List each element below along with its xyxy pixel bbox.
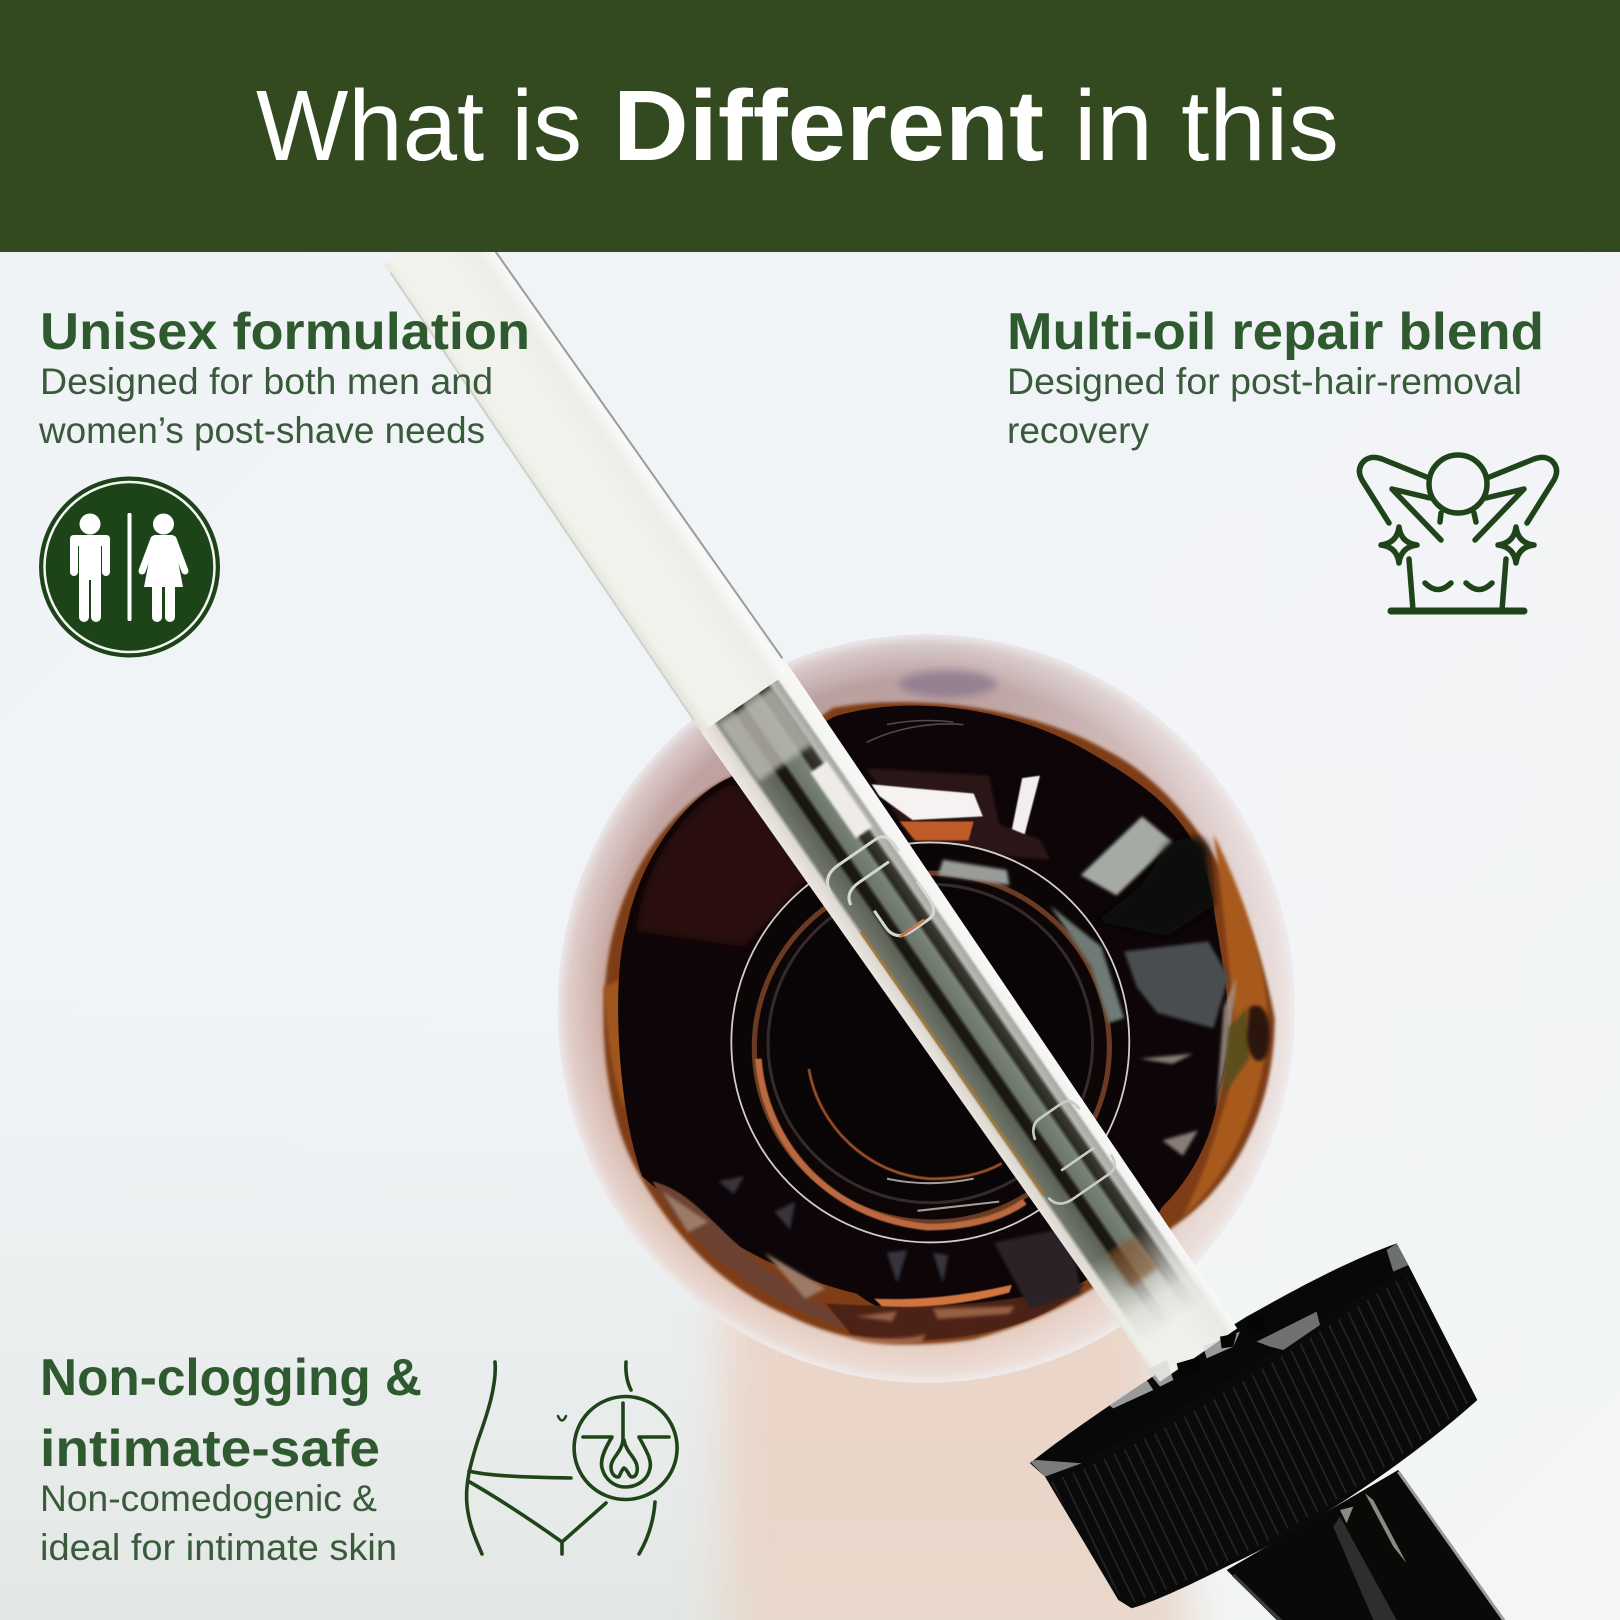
- brown fade inside tube: [1107, 1235, 1158, 1287]
- text block: non-clogging and intimate-safe: [40, 1349, 422, 1568]
- upper tube glass: [379, 205, 1250, 1395]
- lower reflections in base: [719, 1176, 948, 1283]
- neck grey speckle: [1050, 906, 1124, 1023]
- neck glints: [1340, 1493, 1407, 1563]
- left amber glow: [604, 980, 625, 1110]
- glass pipette tube: [379, 205, 1250, 1395]
- dark panel around top glare: [867, 768, 1050, 860]
- bottle rim light: [558, 635, 1295, 1383]
- grey window reflection: [1081, 816, 1173, 896]
- neck outer ring: [731, 842, 1129, 1242]
- black ribbed cap front: [1030, 1243, 1477, 1608]
- bottle right side light: [558, 635, 1295, 1383]
- bottle shadow on the surface: [725, 1280, 1195, 1620]
- neck speckle top: [938, 860, 1009, 885]
- tube right edge line: [471, 214, 782, 661]
- top copper reflection: [900, 822, 974, 840]
- description: multi-oil line one: Designed for post-hair-removal: [1007, 361, 1522, 402]
- right streak reflections: [1139, 977, 1236, 1156]
- icon: relaxed torso with sparkles: [1359, 455, 1557, 611]
- neck copper ring: [754, 873, 1109, 1222]
- cap back rim and interior: [1030, 1243, 1408, 1477]
- bright upper reflection through tube: [810, 761, 872, 838]
- text block: unisex formulation: [38, 303, 530, 451]
- description: non-comedogenic: Non-comedogenic &: [40, 1478, 377, 1519]
- top white glare: [872, 784, 983, 820]
- neck highlight lower: [887, 1179, 999, 1211]
- icon: hips with hair follicle: [467, 1362, 677, 1554]
- cap ribs: [1050, 1275, 1472, 1603]
- title: [256, 70, 1339, 182]
- heading: unisex: Unisex formulation: [40, 303, 530, 361]
- right window reflection: [1124, 941, 1229, 1028]
- header band: [0, 0, 1620, 252]
- top scratch lines: [867, 720, 963, 742]
- neck core copper arc: [809, 1069, 1002, 1179]
- right amber glow: [1183, 834, 1267, 1217]
- neck copper lower arc: [758, 1059, 1025, 1227]
- icon: man and woman restroom sign: [39, 476, 220, 658]
- neck inner ring: [768, 884, 1093, 1203]
- glass bubble bottom: [1009, 1097, 1119, 1210]
- narrow white glare: [1012, 776, 1040, 834]
- cap inner black notches: [1177, 1313, 1267, 1377]
- cap inner glints: [1107, 1332, 1240, 1408]
- bottle outer glass: [558, 635, 1295, 1383]
- right dark stain: [1247, 1005, 1270, 1061]
- description: intimate skin: ideal for intimate skin: [40, 1527, 397, 1568]
- neck left highlight: [1233, 1575, 1283, 1620]
- cap rim highlight left: [1030, 1460, 1082, 1477]
- amber bottle seen from above: [558, 635, 1295, 1383]
- mid tube stripes: [700, 669, 1222, 1354]
- mauve smudge on shoulder: [900, 671, 997, 697]
- lower brown band: [826, 1283, 1086, 1340]
- glass bubble top: [820, 832, 940, 957]
- neck edge highlight: [1398, 1472, 1508, 1620]
- cap rim highlight right: [1387, 1243, 1408, 1272]
- dark oil mass: [618, 706, 1229, 1323]
- glass bubble top copper: [900, 920, 924, 937]
- upper left brown reflection: [637, 783, 826, 947]
- heading: intimate-safe: intimate-safe: [40, 1420, 380, 1478]
- amber line along left inner wall: [861, 932, 1044, 1195]
- lower left brown streaks: [652, 1181, 867, 1334]
- description: unisex line one: Designed for both men and: [40, 361, 493, 402]
- title: in this: [1074, 70, 1339, 182]
- cap rim highlight centre: [1257, 1312, 1320, 1350]
- description: multi-oil line two: recovery: [1007, 410, 1149, 451]
- title: What is: [256, 70, 582, 182]
- text block: multi-oil repair blend: [1007, 303, 1544, 451]
- right olive stain: [1224, 1008, 1249, 1094]
- neck centre stripe: [1333, 1517, 1397, 1620]
- pale glass end: [719, 687, 813, 782]
- heading: non-clogging: Non-clogging &: [40, 1349, 422, 1407]
- lower left pale mottling: [662, 1191, 826, 1299]
- heading: multi-oil: Multi-oil repair blend: [1007, 303, 1544, 361]
- amber liquid ring: [603, 702, 1275, 1344]
- dark amber blob at window: [1096, 837, 1213, 936]
- lower copper glint: [874, 1285, 1012, 1307]
- lower right grey panel: [994, 1227, 1081, 1309]
- cap body: [1045, 1265, 1477, 1608]
- dropper neck below cap: [1227, 1470, 1513, 1620]
- lower tan glint: [846, 1306, 1014, 1345]
- title: Different: [613, 70, 1044, 182]
- description: unisex line two: women’s post-shave needs: [38, 410, 485, 451]
- tube left edge line: [386, 273, 698, 720]
